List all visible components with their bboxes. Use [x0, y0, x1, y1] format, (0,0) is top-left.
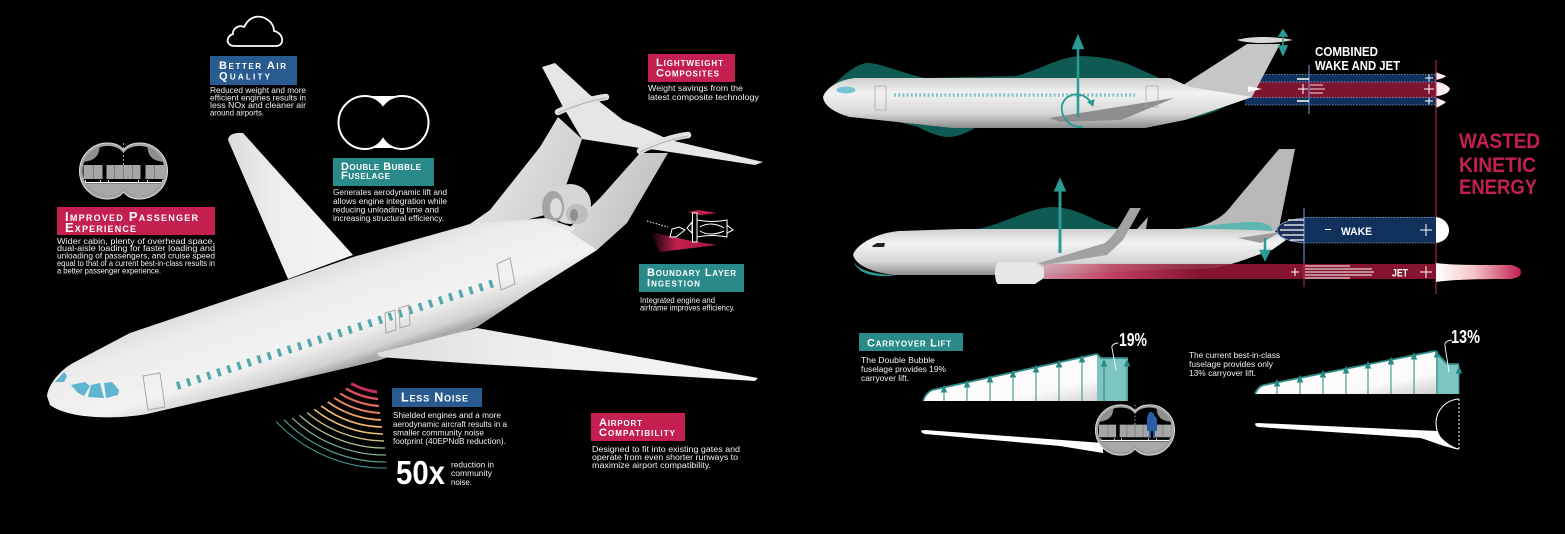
- label: wake: WAKE: [1341, 226, 1372, 238]
- panel: lightweight composites: Weight savings from the: [648, 84, 744, 93]
- callout: 50x noise reduction: noise.: [451, 478, 472, 487]
- diagram: conventional aircraft side view: [853, 149, 1521, 287]
- rear fuselage teal: [1180, 222, 1273, 231]
- panel: less noise: aerodynamic aircraft results in a: [393, 420, 508, 429]
- wake velocity dome: [1277, 218, 1304, 243]
- wake band: [1243, 217, 1449, 243]
- panel: airport compatibility: Airport: [599, 417, 642, 429]
- rear engine: [542, 184, 591, 224]
- panel: improved passenger experience: [57, 207, 215, 276]
- cockpit windows: [872, 243, 885, 247]
- velocity profile lobes: [1436, 72, 1450, 108]
- rear fuselage deck: [470, 218, 575, 300]
- panel: improved passenger experience: equal to that of a current best-in-class results in: [57, 259, 215, 268]
- panel: carryover lift: Carryover Lift: [867, 338, 951, 350]
- cockpit windows: [55, 372, 119, 398]
- icon: boundary layer ingestion: [647, 210, 733, 252]
- callout: 50x noise reduction: community: [451, 469, 492, 478]
- lift distribution: [829, 56, 1232, 137]
- icon: double bubble wing planform: [921, 405, 1175, 455]
- panel: airport compatibility: Designed to fit into existing gates and: [592, 445, 740, 454]
- heading: wasted kinetic energy: ENERGY: [1459, 176, 1537, 199]
- icon: passenger cabin cross-section: [80, 143, 168, 199]
- panel: improved passenger experience: Experience: [65, 220, 136, 235]
- label: jet: JET: [1392, 268, 1408, 280]
- text: best-in-class description: [1189, 351, 1280, 378]
- chart: best-in-class spanwise lift: [1255, 327, 1480, 394]
- panel: carryover lift: fuselage provides 19%: [861, 365, 946, 374]
- doors: [143, 258, 515, 410]
- panel: better air quality: less NOx and cleaner air: [210, 101, 306, 110]
- text: best-in-class description: 13% carryover lift.: [1189, 369, 1256, 378]
- callout: 50x noise reduction: reduction in: [451, 460, 494, 470]
- heading: wasted kinetic energy: [1459, 130, 1540, 199]
- panel: airport compatibility: maximize airport compatibility.: [592, 461, 711, 470]
- panel: carryover lift: [859, 333, 963, 383]
- passenger window row: [177, 282, 497, 386]
- panel: better air quality: Reduced weight and more: [210, 86, 307, 95]
- panel: improved passenger experience: dual-aisle loading for faster loading and: [57, 244, 215, 253]
- first tail fin: [470, 117, 582, 232]
- tail fin: [1180, 44, 1280, 118]
- icon: cloud: [228, 17, 282, 46]
- heading: combined wake and jet: COMBINED: [1315, 44, 1378, 59]
- panel: better air quality: Quality: [219, 70, 271, 82]
- heading: combined wake and jet: [1315, 44, 1400, 73]
- fuselage: [853, 229, 1286, 275]
- panel: improved passenger experience: unloading of passengers, and cruise speed: [57, 252, 215, 260]
- T-tail stabilizer: [1237, 37, 1293, 43]
- panel: better air quality: Better Air: [219, 60, 286, 72]
- panel: carryover lift: The Double Bubble: [861, 356, 936, 365]
- noise wave arcs: [276, 384, 387, 468]
- heading: wasted kinetic energy: WASTED: [1459, 130, 1540, 153]
- panel: double bubble fuselage: Generates aerodynamic lift and: [333, 188, 447, 197]
- panel: double bubble fuselage: [333, 158, 448, 223]
- jet arrows: [1305, 266, 1374, 278]
- jet velocity plume: [1436, 263, 1521, 282]
- panel: boundary layer ingestion: airframe improves efficiency.: [640, 304, 735, 312]
- window row: [894, 93, 1135, 97]
- panel: lightweight composites: latest composite technology: [648, 93, 759, 102]
- tail pod rings: [558, 97, 688, 152]
- panel: airport compatibility: operate from even shorter runways to: [592, 453, 739, 462]
- callout: 50x noise reduction: 50x: [396, 454, 446, 491]
- panel: improved passenger experience: Improved Passenger: [65, 209, 198, 224]
- panel: better air quality: around airports.: [210, 108, 264, 118]
- nose teal: [854, 262, 897, 276]
- panel: less noise: Shielded engines and a more: [393, 411, 502, 420]
- second tail fin: [500, 153, 668, 292]
- fuselage: [823, 78, 1252, 128]
- tail force arrow: [1279, 30, 1287, 55]
- panel: lightweight composites: [648, 54, 759, 102]
- panel: boundary layer ingestion: Ingestion: [647, 278, 700, 290]
- tail stabilizer: [542, 63, 763, 165]
- signs: [1291, 224, 1432, 278]
- chart: double bubble spanwise lift: 19%: [1119, 330, 1147, 350]
- panel: boundary layer ingestion: Integrated engine and: [640, 296, 715, 305]
- heading: wasted kinetic energy: KINETIC: [1459, 154, 1536, 177]
- wing: [1049, 98, 1174, 122]
- panel: improved passenger experience: Wider cabin, plenty of overhead space,: [57, 237, 215, 246]
- cockpit: [836, 86, 856, 94]
- lift arrow: [1074, 37, 1082, 117]
- panel: double bubble fuselage: increasing structural efficiency.: [333, 214, 444, 223]
- right wing: [377, 328, 758, 381]
- wake cone: [1248, 86, 1262, 92]
- flow arrows: [1297, 74, 1434, 104]
- wake and jet bands: [1245, 74, 1436, 105]
- panel: boundary layer ingestion: [639, 264, 744, 312]
- tail fin: [1180, 149, 1295, 236]
- panel: less noise: footprint (40EPNdB reduction).: [393, 437, 506, 446]
- engine: [995, 262, 1044, 284]
- panel: airport compatibility: Compatibility: [599, 427, 676, 439]
- callout: 50x noise reduction: [396, 454, 494, 491]
- heading: combined wake and jet: WAKE AND JET: [1315, 58, 1400, 73]
- chart: best-in-class spanwise lift: 13%: [1451, 327, 1480, 347]
- panel: carryover lift: carryover lift.: [861, 374, 909, 383]
- wasted energy marker line: [1435, 60, 1437, 294]
- tail stabilizer: [1238, 232, 1281, 243]
- lift arrow: [1056, 181, 1064, 253]
- panel: double bubble fuselage: allows engine integration while: [333, 197, 448, 206]
- panel: better air quality: [210, 56, 307, 118]
- panel: improved passenger experience: a better passenger experience.: [57, 266, 161, 276]
- panel: less noise: Less Noise: [401, 390, 468, 404]
- main aircraft illustration: [47, 63, 763, 417]
- panel: less noise: smaller community noise: [393, 428, 485, 438]
- diagram: double bubble side view: [823, 30, 1450, 137]
- panel: double bubble fuselage: Double Bubble: [341, 161, 422, 173]
- tail force arrow: [1261, 238, 1269, 259]
- panel: less noise: [392, 388, 508, 446]
- fuselage: [47, 222, 597, 417]
- wing and winglet: [1039, 208, 1141, 265]
- wake arrows: [1280, 220, 1304, 240]
- chart: double bubble spanwise lift: [923, 330, 1147, 401]
- doors: [875, 86, 1158, 110]
- panel: airport compatibility: [591, 413, 740, 470]
- icon: best-in-class wing planform: [1255, 399, 1459, 449]
- text: best-in-class description: The current best-in-class: [1189, 351, 1280, 360]
- panel: double bubble fuselage: Fuselage: [341, 170, 391, 182]
- panel: better air quality: efficient engines results in: [210, 94, 306, 102]
- panel: boundary layer ingestion: Boundary Layer: [647, 267, 736, 279]
- lift distribution: [976, 207, 1121, 229]
- boundary marker lines: [1308, 65, 1310, 114]
- marker line: [1303, 208, 1305, 262]
- panel: lightweight composites: Lightweight: [656, 57, 723, 69]
- panel: double bubble fuselage: reducing unloading time and: [333, 206, 439, 214]
- pitching moment arrow: [1062, 94, 1092, 127]
- jet overlay on fuselage: [1044, 264, 1240, 279]
- panel: lightweight composites: Composites: [656, 68, 720, 80]
- icon: double bubble cross-section: [338, 96, 428, 149]
- text: best-in-class description: fuselage provides only: [1189, 360, 1273, 369]
- left wing: [228, 133, 353, 279]
- jet band: [1044, 264, 1436, 279]
